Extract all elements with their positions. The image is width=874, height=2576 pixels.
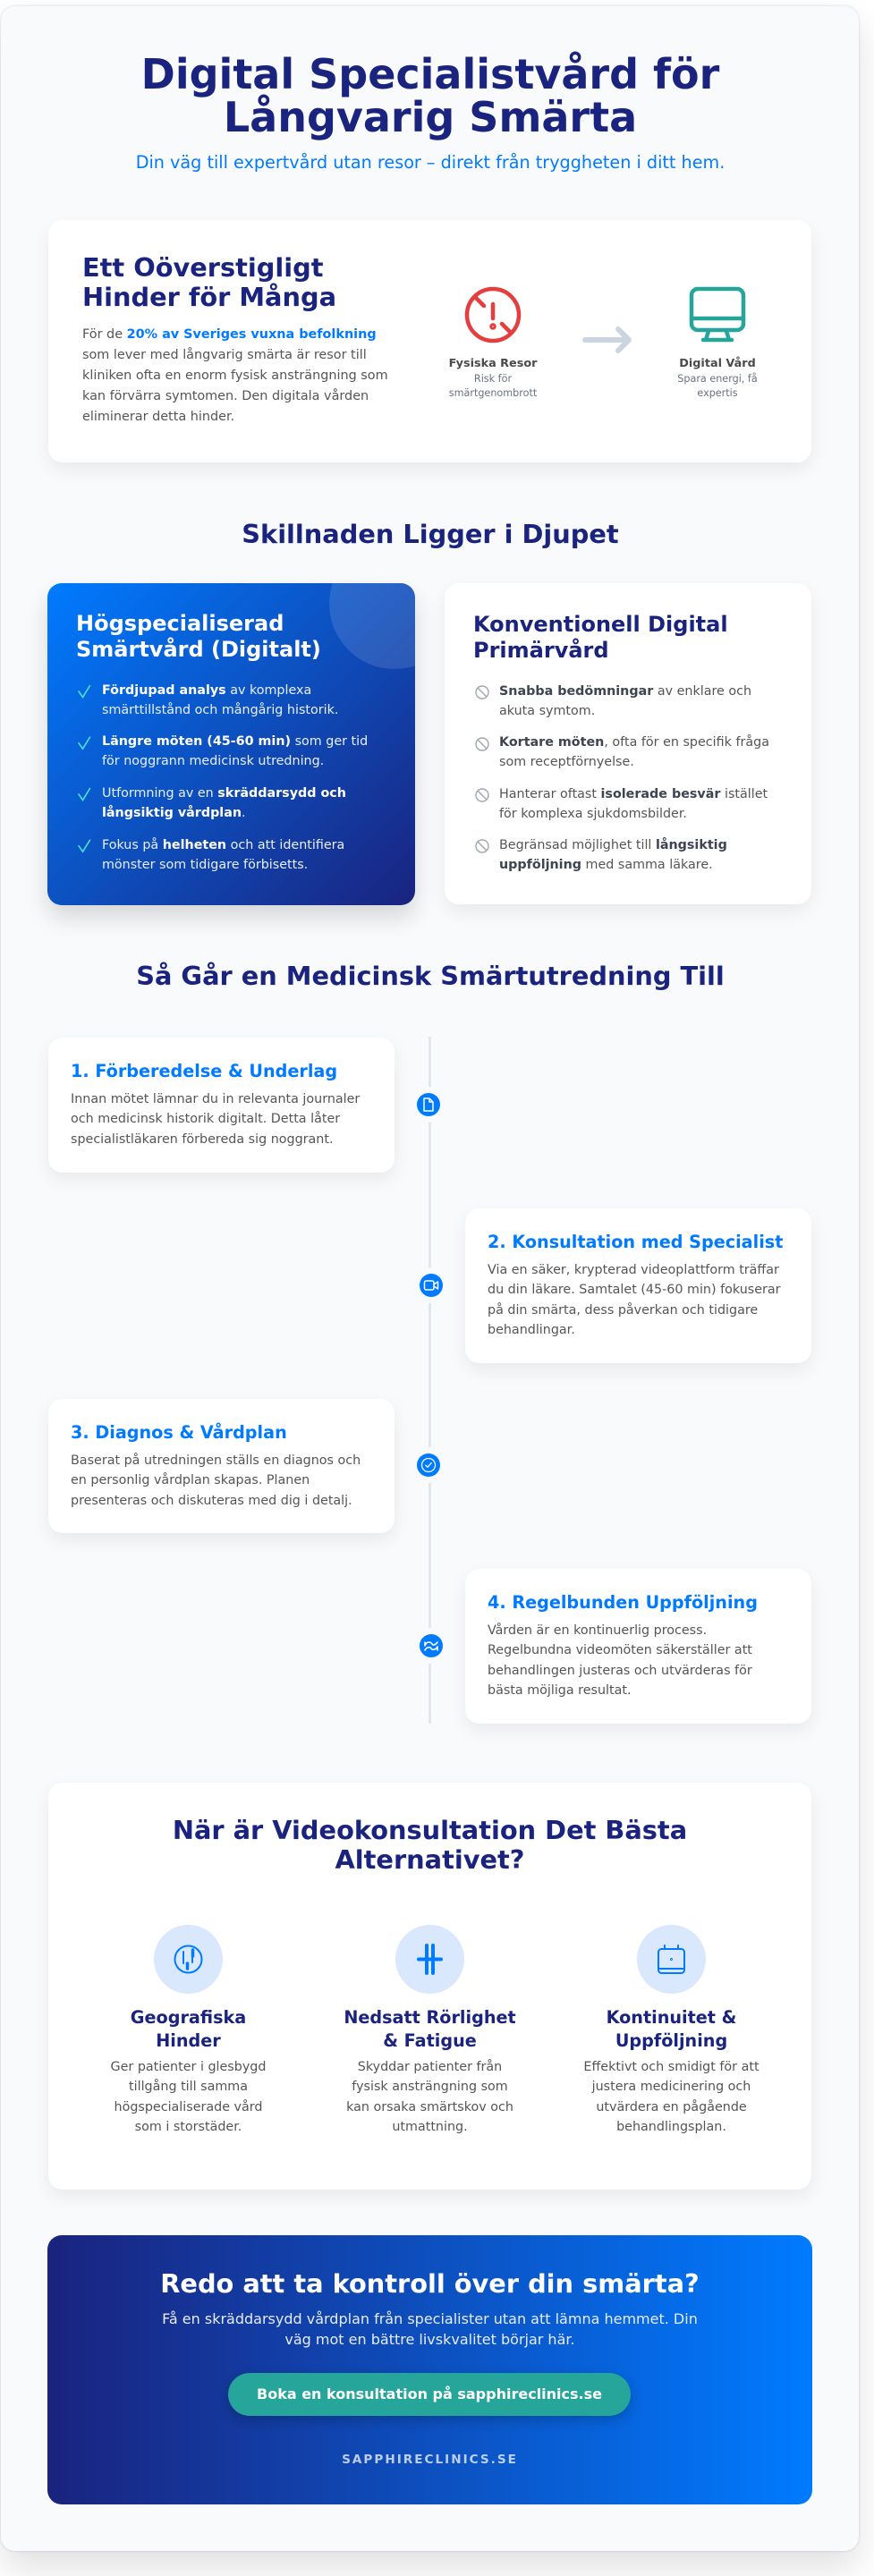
decorative circle	[329, 538, 460, 669]
benefit: continuity	[583, 1925, 759, 2134]
icon: calendar	[637, 1925, 706, 1994]
item 2: för noggrann medicinsk utredning.	[102, 754, 324, 768]
barrier text	[82, 327, 388, 424]
icon: document	[417, 1093, 440, 1116]
specialist heading: Smärtvård (Digitalt)	[76, 637, 321, 662]
cta button: Boka en konsultation på sapphireclinics.se	[257, 2385, 602, 2402]
item 1: smärttillstånd och mångårig historik.	[102, 703, 338, 717]
barrier text: kliniken ofta en enorm fysisk ansträngning som	[82, 369, 388, 383]
conventional heading: Primärvård	[473, 638, 609, 663]
step 3 text: presenteras och diskuteras med dig i detalj.	[71, 1494, 352, 1508]
geography text: tillgång till samma	[129, 2080, 248, 2094]
item 3: Utformning av en skräddarsydd och	[102, 786, 346, 801]
arrow	[582, 326, 632, 353]
label: physical travel: smärtgenombrott	[449, 387, 537, 399]
item 3: Hanterar oftast isolerade besvär istället	[499, 787, 768, 801]
geography text: Ger patienter i glesbygd	[111, 2060, 266, 2074]
geography text	[111, 2060, 266, 2134]
mobility text: kan orsaka smärtskov och	[346, 2100, 513, 2114]
item 4: uppföljning med samma läkare.	[499, 858, 713, 872]
item 3	[102, 786, 346, 820]
label: physical travel: Fysiska Resor	[449, 357, 537, 370]
title: Långvarig Smärta	[224, 93, 637, 141]
timeline line	[429, 1037, 431, 1724]
panel: when video is best	[48, 1783, 811, 2190]
mobility text: fysisk ansträngning som	[352, 2080, 508, 2094]
item 2	[499, 734, 769, 769]
item 2: Längre möten (45-60 min) som ger tid	[102, 734, 368, 749]
label: digital care: expertis	[697, 387, 738, 399]
barrier heading: Hinder för Många	[82, 282, 336, 312]
barrier text: som lever med långvarig smärta är resor till	[82, 348, 367, 362]
item 4: Fokus på helheten och att identifiera	[102, 838, 344, 852]
mobility text: Skyddar patienter från	[358, 2060, 502, 2074]
step 3 text	[71, 1453, 361, 1508]
icon: cross bars	[395, 1925, 464, 1994]
step 1 title: 1. Förberedelse & Underlag	[71, 1061, 337, 1081]
heading: depth: Skillnaden Ligger i Djupet	[242, 519, 619, 549]
specialist list	[78, 683, 368, 872]
item 3	[499, 787, 768, 821]
label: physical travel: Risk för	[474, 373, 512, 385]
barrier text: kan förvärra symtomen. Den digitala vården	[82, 389, 369, 403]
panel: call to action	[47, 2235, 812, 2504]
icon: check circle	[417, 1453, 440, 1477]
step 2 card	[465, 1208, 811, 1363]
cta text: Få en skräddarsydd vårdplan från specialister utan att lämna hemmet. Din	[162, 2310, 698, 2327]
icon: monitor	[689, 286, 746, 342]
continuity text: behandlingsplan.	[616, 2120, 726, 2134]
heading: process: Så Går en Medicinsk Smärtutredning Till	[136, 961, 725, 991]
cta heading: Redo att ta kontroll över din smärta?	[160, 2268, 700, 2299]
item 3: långsiktig vårdplan.	[102, 806, 246, 820]
specialist heading	[76, 611, 321, 662]
cta text: väg mot en bättre livskvalitet börjar här.	[284, 2331, 575, 2348]
step 4 title: 4. Regelbunden Uppföljning	[488, 1592, 758, 1613]
continuity title	[607, 2007, 736, 2051]
continuity text: Effektivt och smidigt för att	[583, 2060, 759, 2074]
step 1 text: Innan mötet lämnar du in relevanta journaler	[71, 1092, 360, 1106]
item 2	[102, 734, 368, 768]
continuity text	[583, 2060, 759, 2134]
item 2: som receptförnyelse.	[499, 755, 634, 769]
item 4	[499, 837, 727, 872]
item 1	[102, 683, 338, 717]
barrier text: eliminerar detta hinder.	[82, 410, 234, 424]
icon: refresh	[420, 1634, 443, 1657]
panel: specialist care	[47, 583, 415, 905]
step 2 text: på din smärta, dess påverkan och tidigare	[488, 1303, 758, 1318]
mobility title	[344, 2007, 516, 2051]
label: digital care: Digital Vård	[679, 357, 756, 370]
step 1 card	[48, 1038, 395, 1173]
item 4: Begränsad möjlighet till långsiktig	[499, 838, 727, 852]
step 3 text: en personlig vårdplan skapas. Planen	[71, 1473, 310, 1487]
step 3 title: 3. Diagnos & Vårdplan	[71, 1422, 287, 1443]
benefit: mobility	[344, 1925, 516, 2134]
step 1 text: och medicinsk historik digitalt. Detta låter	[71, 1112, 340, 1126]
item 1: Fördjupad analys av komplexa	[102, 683, 311, 698]
label: physical travel	[449, 357, 537, 399]
continuity text: utvärdera en pågående	[596, 2100, 747, 2114]
step 4 text: Regelbundna videomöten säkerställer att	[488, 1643, 752, 1657]
mobility title: Nedsatt Rörlighet	[344, 2007, 516, 2028]
barrier text: För de 20% av Sveriges vuxna befolkning	[82, 327, 377, 342]
step 3 text: Baserat på utredningen ställs en diagnos och	[71, 1453, 361, 1468]
footer brand: SAPPHIRECLINICS.SE	[342, 2453, 518, 2467]
subtitle: Din väg till expertvård utan resor – direkt från tryggheten i ditt hem.	[136, 152, 725, 173]
barrier heading: Ett Oöverstigligt	[82, 252, 324, 283]
item 1	[499, 684, 751, 718]
conventional heading: Konventionell Digital	[473, 612, 728, 637]
step 4 card	[465, 1569, 811, 1724]
item 1: Snabba bedömningar av enklare och	[499, 684, 751, 699]
geography title	[131, 2007, 246, 2051]
panel heading: När är Videokonsultation Det Bästa	[173, 1815, 687, 1845]
item 4: mönster som tidigare förbisetts.	[102, 858, 308, 872]
step 4 text	[488, 1623, 752, 1698]
step 3 card	[48, 1399, 395, 1533]
step 1 text: specialistläkaren förbereda sig noggrant.	[71, 1132, 334, 1147]
title	[141, 50, 719, 141]
continuity title: Kontinuitet &	[607, 2007, 736, 2028]
check icons	[78, 685, 91, 853]
mobility text	[346, 2059, 513, 2134]
mobility text: utmattning.	[392, 2120, 468, 2134]
label: digital care	[677, 356, 758, 399]
step 4 text: bästa möjliga resultat.	[488, 1683, 632, 1698]
benefit: geography	[111, 1925, 266, 2134]
step 2 text: Via en säker, krypterad videoplattform träffar	[488, 1263, 779, 1277]
barrier heading	[82, 252, 336, 312]
cta button	[228, 2373, 631, 2416]
icon: no travel	[465, 286, 521, 343]
panel heading: Alternativet?	[335, 1844, 524, 1875]
conventional heading	[473, 612, 728, 663]
conventional list	[475, 684, 769, 872]
label: digital care: Spara energi, få	[677, 373, 758, 385]
item 4	[102, 837, 344, 872]
continuity text: justera medicinering och	[592, 2080, 751, 2094]
panel: barrier	[48, 220, 811, 462]
step 2 text	[488, 1263, 781, 1337]
item 2: Kortare möten, ofta för en specifik fråga	[499, 735, 769, 750]
continuity title: Uppföljning	[615, 2030, 727, 2051]
step 2 text: du din läkare. Samtalet (45-60 min) fokuserar	[488, 1283, 781, 1297]
step 4 text: Vården är en kontinuerlig process.	[488, 1623, 707, 1638]
icon: location circle	[154, 1925, 223, 1994]
specialist heading: Högspecialiserad	[76, 611, 284, 636]
geography title: Geografiska	[131, 2007, 246, 2028]
geography text: högspecialiserade vård	[115, 2100, 262, 2114]
cta text	[162, 2310, 698, 2348]
mobility title: & Fatigue	[383, 2030, 477, 2051]
step 1 text	[71, 1092, 360, 1147]
step 2 text: behandlingar.	[488, 1323, 575, 1337]
item 1: akuta symtom.	[499, 704, 595, 718]
panel: conventional care	[445, 583, 811, 904]
title: Digital Specialistvård för	[141, 50, 719, 98]
step 4 text: behandlingen justeras och utvärderas för	[488, 1664, 752, 1678]
step 2 title: 2. Konsultation med Specialist	[488, 1232, 783, 1252]
icon: video	[420, 1274, 443, 1297]
panel heading	[173, 1815, 687, 1875]
geography text: som i storstäder.	[135, 2120, 242, 2134]
geography title: Hinder	[156, 2030, 221, 2051]
ban icons	[475, 685, 489, 853]
item 3: för komplexa sjukdomsbilder.	[499, 807, 687, 821]
